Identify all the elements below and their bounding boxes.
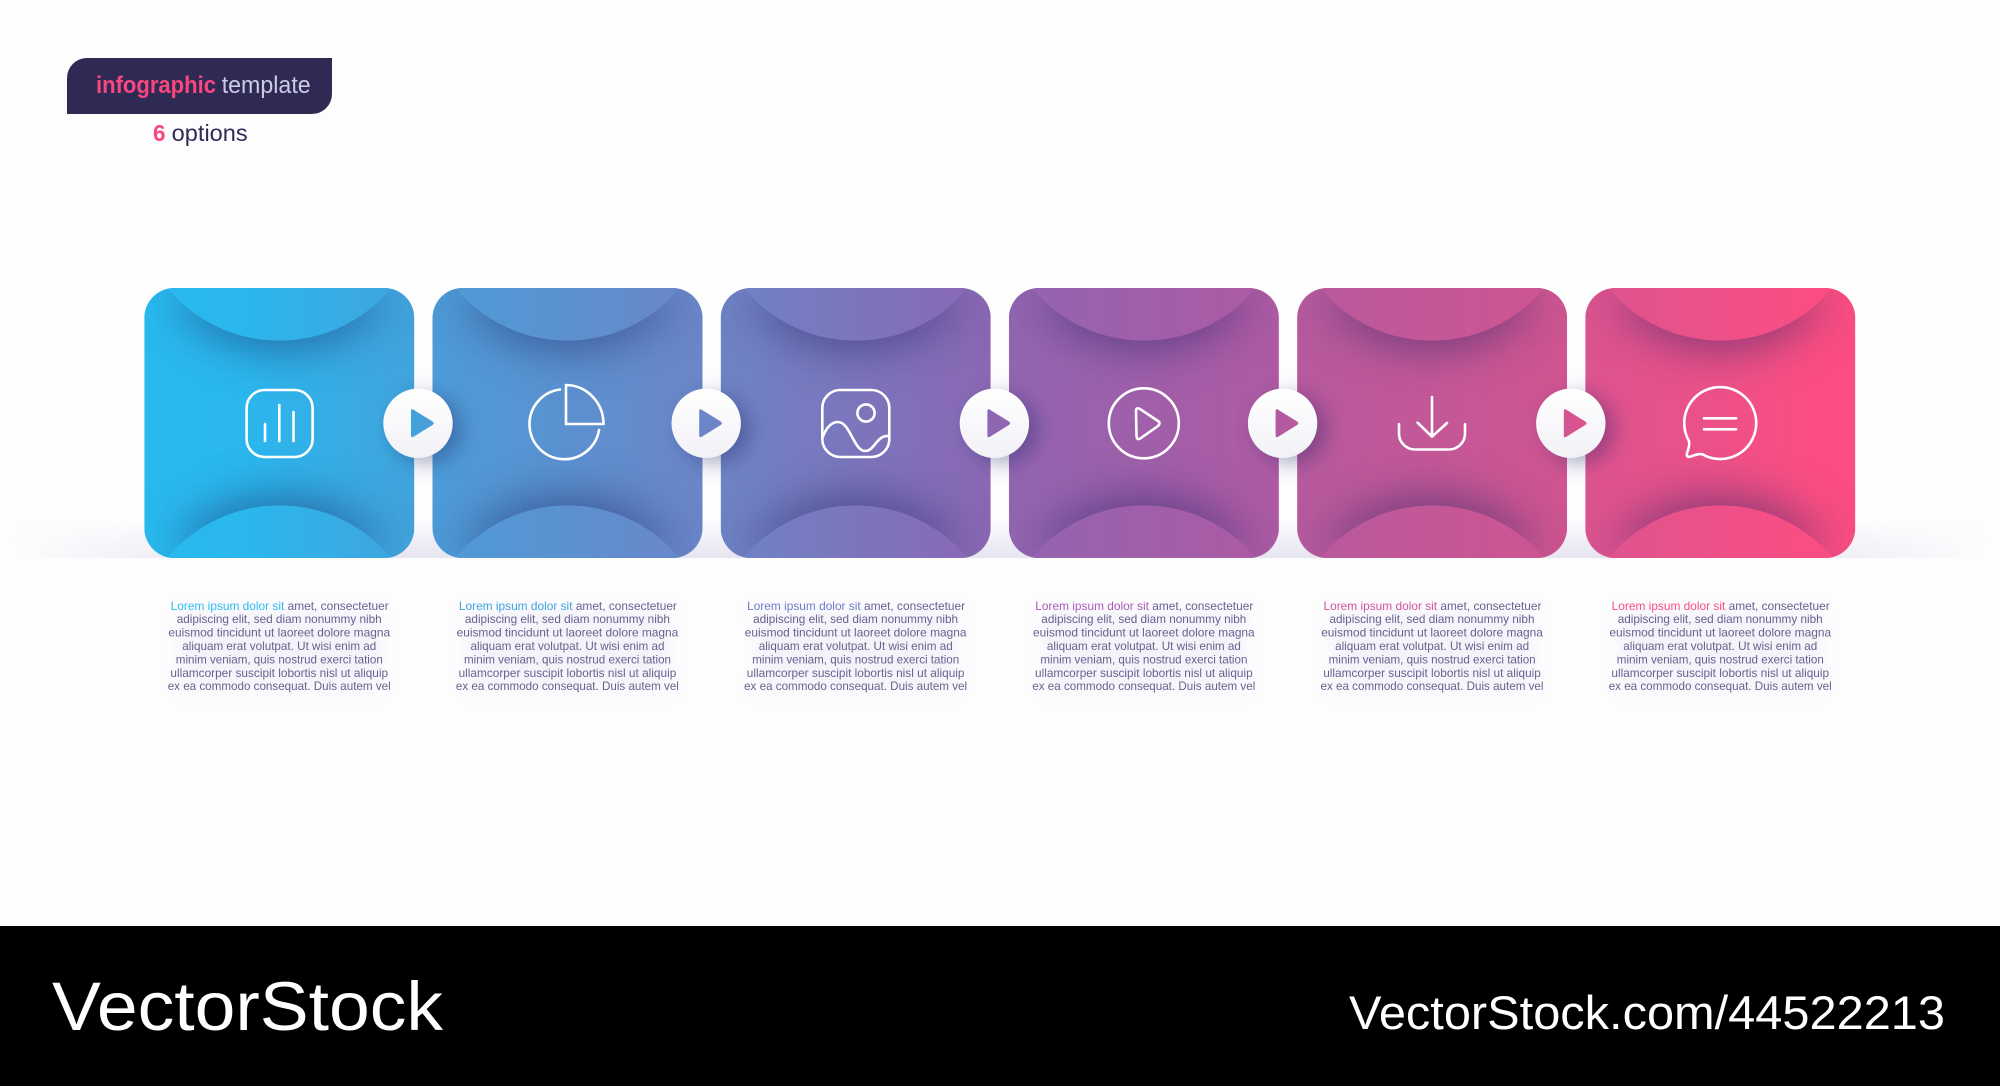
icon: chat bubble [1684,387,1756,459]
text block 1: Lorem ipsum dolor sit amet, consectetuer [171,599,389,613]
icon: download [1399,397,1465,450]
card 6 [1585,288,1855,558]
text block 4: ex ea commodo consequat. Duis autem vel [1032,679,1255,693]
header badge: template [222,72,311,99]
header badge: infographic [96,72,216,99]
card 2 [432,288,702,558]
arrow button 5 [1536,389,1606,458]
text block 5: minim veniam, quis nostrud exerci tation [1329,652,1536,666]
text block 3: ullamcorper suscipit lobortis nisl ut aliquip [747,666,965,680]
text block 5: adipiscing elit, sed diam nonummy nibh [1330,612,1535,626]
text block 3: minim veniam, quis nostrud exerci tation [752,652,959,666]
text block 4: minim veniam, quis nostrud exerci tation [1040,652,1247,666]
text block 2: minim veniam, quis nostrud exerci tation [464,652,671,666]
text block 2: adipiscing elit, sed diam nonummy nibh [465,612,670,626]
text block 4: Lorem ipsum dolor sit amet, consectetuer [1035,599,1253,613]
icon: image [822,390,889,457]
text block 3: ex ea commodo consequat. Duis autem vel [744,679,967,693]
subtitle: 6 options: options [172,120,248,146]
text block 4: euismod tincidunt ut laoreet dolore magna [1033,626,1255,640]
text block 3: Lorem ipsum dolor sit amet, consectetuer [747,599,965,613]
text block 2 [456,599,679,693]
text block 3: euismod tincidunt ut laoreet dolore magna [745,626,967,640]
footer bar: VectorStock.com/44522213 [1349,986,1945,1039]
footer bar: VectorStock [52,968,444,1045]
arrow button 2 [672,389,741,458]
footer bar [0,926,2000,1086]
text block 1: ullamcorper suscipit lobortis nisl ut aliquip [170,666,389,680]
text block 1: euismod tincidunt ut laoreet dolore magna [168,626,391,640]
icon: play circle [1109,388,1179,458]
text block 6: Lorem ipsum dolor sit amet, consectetuer [1612,599,1830,613]
text block 4 [1032,599,1255,693]
text block 6: euismod tincidunt ut laoreet dolore magna [1609,626,1832,640]
text block 2: euismod tincidunt ut laoreet dolore magna [457,626,679,640]
text block 4: aliquam erat volutpat. Ut wisi enim ad [1047,639,1241,653]
text block 5 [1320,599,1544,693]
text block 2: ullamcorper suscipit lobortis nisl ut aliquip [459,666,677,680]
text block 5: aliquam erat volutpat. Ut wisi enim ad [1335,639,1529,653]
icon: bar chart [247,390,313,457]
arrow button 3 [960,389,1029,458]
header badge [67,58,332,114]
arrow button 4 [1248,389,1317,458]
arrow button 1 [383,389,453,458]
icon: pie chart [529,385,604,459]
text block 6: ullamcorper suscipit lobortis nisl ut aliquip [1611,666,1830,680]
text block 6 [1609,599,1832,693]
text block 2: ex ea commodo consequat. Duis autem vel [456,679,679,693]
text block 3 [744,599,967,693]
text block 1: ex ea commodo consequat. Duis autem vel [168,679,391,693]
text block 6: minim veniam, quis nostrud exerci tation [1617,652,1824,666]
text block 3: aliquam erat volutpat. Ut wisi enim ad [759,639,953,653]
text block 5: Lorem ipsum dolor sit amet, consectetuer [1324,599,1542,613]
text block 1 [168,599,391,693]
text block 6: aliquam erat volutpat. Ut wisi enim ad [1623,639,1817,653]
text block 4: ullamcorper suscipit lobortis nisl ut aliquip [1035,666,1253,680]
text block 5: ex ea commodo consequat. Duis autem vel [1321,679,1544,693]
text block 2: Lorem ipsum dolor sit amet, consectetuer [459,599,677,613]
subtitle: 6 options: 6 [153,120,166,146]
text block 5: ullamcorper suscipit lobortis nisl ut aliquip [1323,666,1541,680]
text block 1: minim veniam, quis nostrud exerci tation [176,652,383,666]
card 3 [721,288,991,558]
card 5 [1297,288,1567,558]
text block 3: adipiscing elit, sed diam nonummy nibh [753,612,958,626]
text block 4: adipiscing elit, sed diam nonummy nibh [1041,612,1246,626]
card 4 [1009,288,1279,558]
text block 2: aliquam erat volutpat. Ut wisi enim ad [471,639,664,653]
text block 5: euismod tincidunt ut laoreet dolore magna [1321,626,1543,640]
card 1 [144,288,414,558]
text block 1: adipiscing elit, sed diam nonummy nibh [177,612,382,626]
text block 6: ex ea commodo consequat. Duis autem vel [1609,679,1832,693]
floor shadow band [86,532,1914,558]
text block 1: aliquam erat volutpat. Ut wisi enim ad [182,639,376,653]
text block 6: adipiscing elit, sed diam nonummy nibh [1618,612,1823,626]
